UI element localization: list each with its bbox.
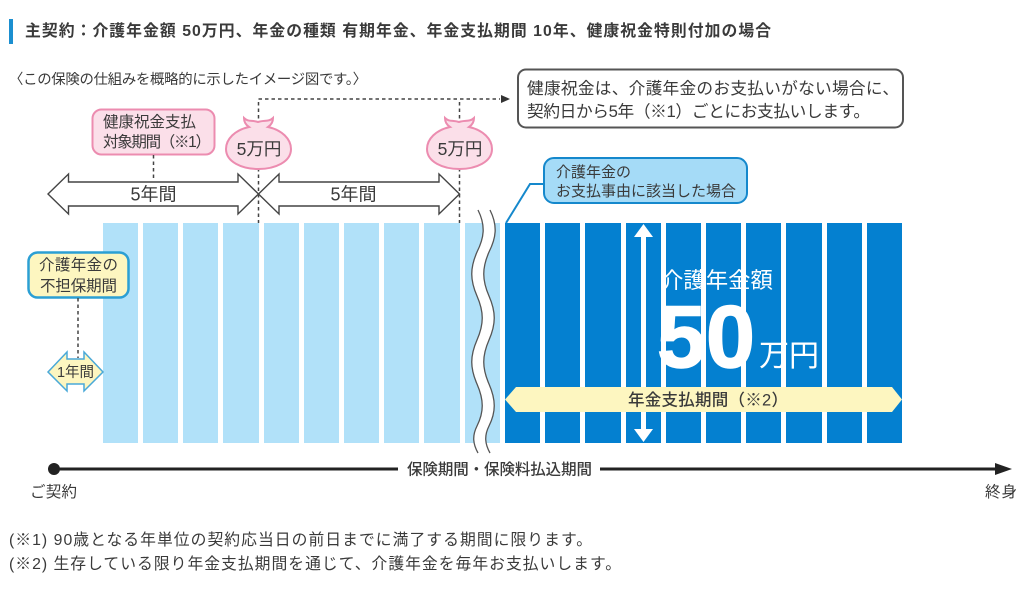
banner: payment period (505, 387, 902, 412)
callout: nursing annuity condition: お支払事由に該当した場合 (556, 183, 736, 200)
callout: waiting period: 不担保期間 (40, 277, 117, 295)
title (9, 19, 771, 44)
callout: bonus explanation: 契約日から5年（※1）ごとにお支払いします。 (527, 102, 870, 121)
arrow: 5 years second: 5年間 (330, 184, 377, 204)
arrow: 1 year (48, 352, 103, 391)
footnote 2: (※2) 生存している限り年金支払期間を通じて、介護年金を毎年お支払いします。 (9, 555, 621, 573)
callout: bonus eligible period: 健康祝金支払 (103, 113, 196, 131)
title: 主契約：介護年金額 50万円、年金の種類 有期年金、年金支払期間 10年、健康祝金特則付加の場合 (25, 21, 771, 40)
annuity amount 50: 50 (657, 287, 755, 386)
arrow: 5 years first: 5年間 (130, 184, 177, 204)
timeline: 保険期間・保険料払込期間 (407, 460, 592, 478)
money bag 1 (226, 118, 291, 169)
arrow: 5 years second (258, 174, 460, 214)
callout: waiting period: 介護年金の (39, 256, 118, 274)
dark blue bars: annuity payment period (505, 223, 902, 443)
label: contract start: ご契約 (30, 483, 77, 501)
callout: bonus explanation: 健康祝金は、介護年金のお支払いがない場合に、 (527, 79, 899, 98)
dotted centre lines over arrows (258, 168, 460, 223)
timeline (48, 460, 1012, 478)
callout: bonus explanation (518, 70, 903, 128)
dotted line from period callout (152, 155, 154, 181)
label: whole life: 終身 (985, 483, 1017, 501)
arrow: 5 years first (48, 174, 258, 214)
callout: bonus eligible period (92, 110, 214, 154)
callout: bonus eligible period: 対象期間（※1） (103, 133, 211, 151)
dotted line from waiting period (77, 298, 79, 358)
light blue bars: premium period (103, 223, 500, 443)
footnote 1: (※1) 90歳となる年単位の契約応当日の前日までに満了する期間に限ります。 (9, 531, 592, 549)
money bag 2: 5万円 (438, 139, 482, 159)
annuity amount label: 介護年金額 (661, 268, 773, 293)
dotted line to bonus note (258, 95, 510, 125)
double arrow: amount height (634, 224, 653, 442)
diagram note: 〈この保険の仕組みを概略的に示したイメージ図です。〉 (9, 71, 367, 88)
money bag 2 (427, 118, 492, 169)
callout: nursing annuity condition (506, 158, 747, 223)
wave break mark (472, 210, 495, 453)
money bag 1: 5万円 (237, 139, 281, 159)
callout: nursing annuity condition: 介護年金の (556, 164, 631, 181)
annuity amount unit: 万円 (759, 340, 819, 373)
arrow: 1 year: 1年間 (57, 364, 94, 381)
callout: waiting period (28, 252, 128, 298)
banner: payment period: 年金支払期間（※2） (628, 390, 788, 410)
